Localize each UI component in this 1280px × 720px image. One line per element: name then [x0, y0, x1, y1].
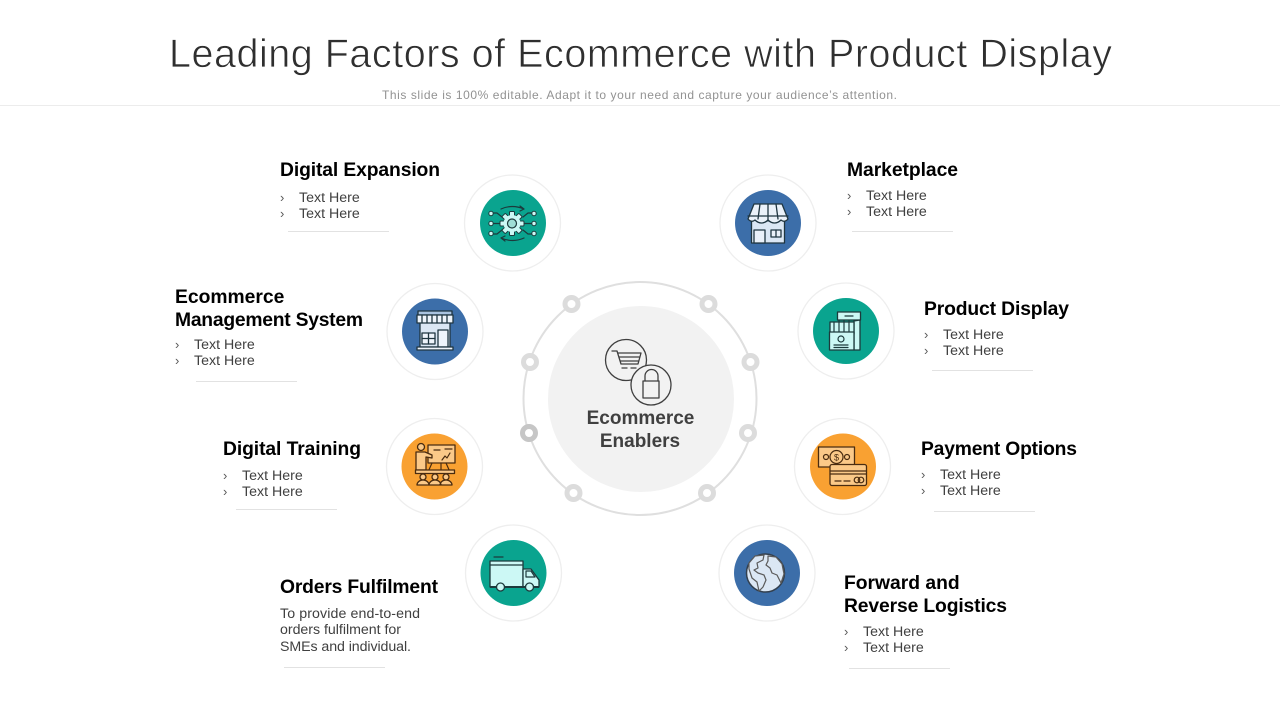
panel: payment options text	[921, 439, 1077, 512]
panel: digital expansion text: Text Here	[299, 206, 360, 222]
panel: digital expansion text: Digital Expansion	[280, 160, 440, 181]
panel: digital training text: Text Here	[242, 484, 303, 500]
panel: digital expansion text: ›	[280, 190, 284, 205]
panel: product display text	[924, 299, 1069, 370]
panel: forward and reverse logistics text: ›	[844, 640, 848, 655]
panel: product display text: Text Here	[943, 343, 1004, 359]
panel: forward and reverse logistics text: Reverse Logistics	[844, 596, 1007, 617]
title: Leading Factors of Ecommerce with Product Display	[169, 32, 1112, 76]
panel: orders fulfilment text	[280, 577, 439, 668]
ring nodes	[522, 298, 757, 500]
panel: ecommerce management system text: Management System	[175, 310, 363, 331]
icon: payment cash and card	[794, 418, 890, 514]
panel: digital expansion text	[280, 160, 440, 232]
panel: orders fulfilment text: To provide end-to-end	[280, 606, 420, 622]
panel: forward and reverse logistics text: ›	[844, 624, 848, 639]
panel: forward and reverse logistics text: Forward and	[844, 573, 960, 594]
panel: payment options text: ›	[921, 467, 925, 482]
panel: marketplace text: Text Here	[866, 204, 927, 220]
icon: product display box	[798, 283, 894, 379]
icon: payment cash and card: $	[834, 452, 839, 462]
panel: forward and reverse logistics text: Text Here	[863, 640, 924, 656]
panel: marketplace text: ›	[847, 188, 851, 203]
panel: marketplace text	[847, 160, 958, 232]
panel: ecommerce management system text: ›	[175, 337, 179, 352]
icon: orders fulfilment truck	[466, 525, 562, 621]
hub label: Enablers	[600, 431, 680, 452]
icon: digital expansion gear	[464, 175, 560, 271]
panel: product display text: Text Here	[943, 327, 1004, 343]
icon: forward and reverse logistics globe	[719, 525, 815, 621]
panel: product display text: Product Display	[924, 299, 1069, 320]
panel: ecommerce management system text: Text Here	[194, 337, 255, 353]
panel: product display text: ›	[924, 327, 928, 342]
panel: forward and reverse logistics text: Text Here	[863, 624, 924, 640]
panel: digital training text: Digital Training	[223, 439, 361, 460]
hub label: Ecommerce	[587, 408, 694, 429]
central hub: Ecommerce Enablers	[522, 282, 757, 515]
panel: digital training text: ›	[223, 484, 227, 499]
panel: marketplace text: ›	[847, 204, 851, 219]
panel: orders fulfilment text: orders fulfilment for	[280, 622, 401, 638]
icon: digital training presenter	[386, 418, 482, 514]
panel: marketplace text: Text Here	[866, 188, 927, 204]
panel: orders fulfilment text: SMEs and individual.	[280, 639, 411, 655]
panel: ecommerce management system text: ›	[175, 353, 179, 368]
panel: digital training text: ›	[223, 468, 227, 483]
panel: ecommerce management system text: Ecommerce	[175, 287, 285, 308]
panel: digital training text: Text Here	[242, 468, 303, 484]
icon: cart and lock	[606, 340, 671, 405]
panel: payment options text: Text Here	[940, 467, 1001, 483]
panel: product display text: ›	[924, 343, 928, 358]
panel: ecommerce management system text: Text Here	[194, 353, 255, 369]
panel: payment options text: ›	[921, 483, 925, 498]
panel: digital expansion text: ›	[280, 206, 284, 221]
panel: orders fulfilment text: Orders Fulfilment	[280, 577, 439, 598]
panel: ecommerce management system text	[175, 287, 363, 382]
icon: ecommerce management store	[387, 284, 483, 380]
panel: digital training text	[223, 439, 361, 510]
panel: marketplace text: Marketplace	[847, 160, 958, 181]
panel: forward and reverse logistics text	[844, 573, 1007, 668]
panel: payment options text: Payment Options	[921, 439, 1077, 460]
panel: digital expansion text: Text Here	[299, 190, 360, 206]
icon: marketplace shop	[720, 175, 816, 271]
subtitle: This slide is 100% editable. Adapt it to your need and capture your audience’s attention.	[382, 88, 897, 102]
panel: payment options text: Text Here	[940, 483, 1001, 499]
